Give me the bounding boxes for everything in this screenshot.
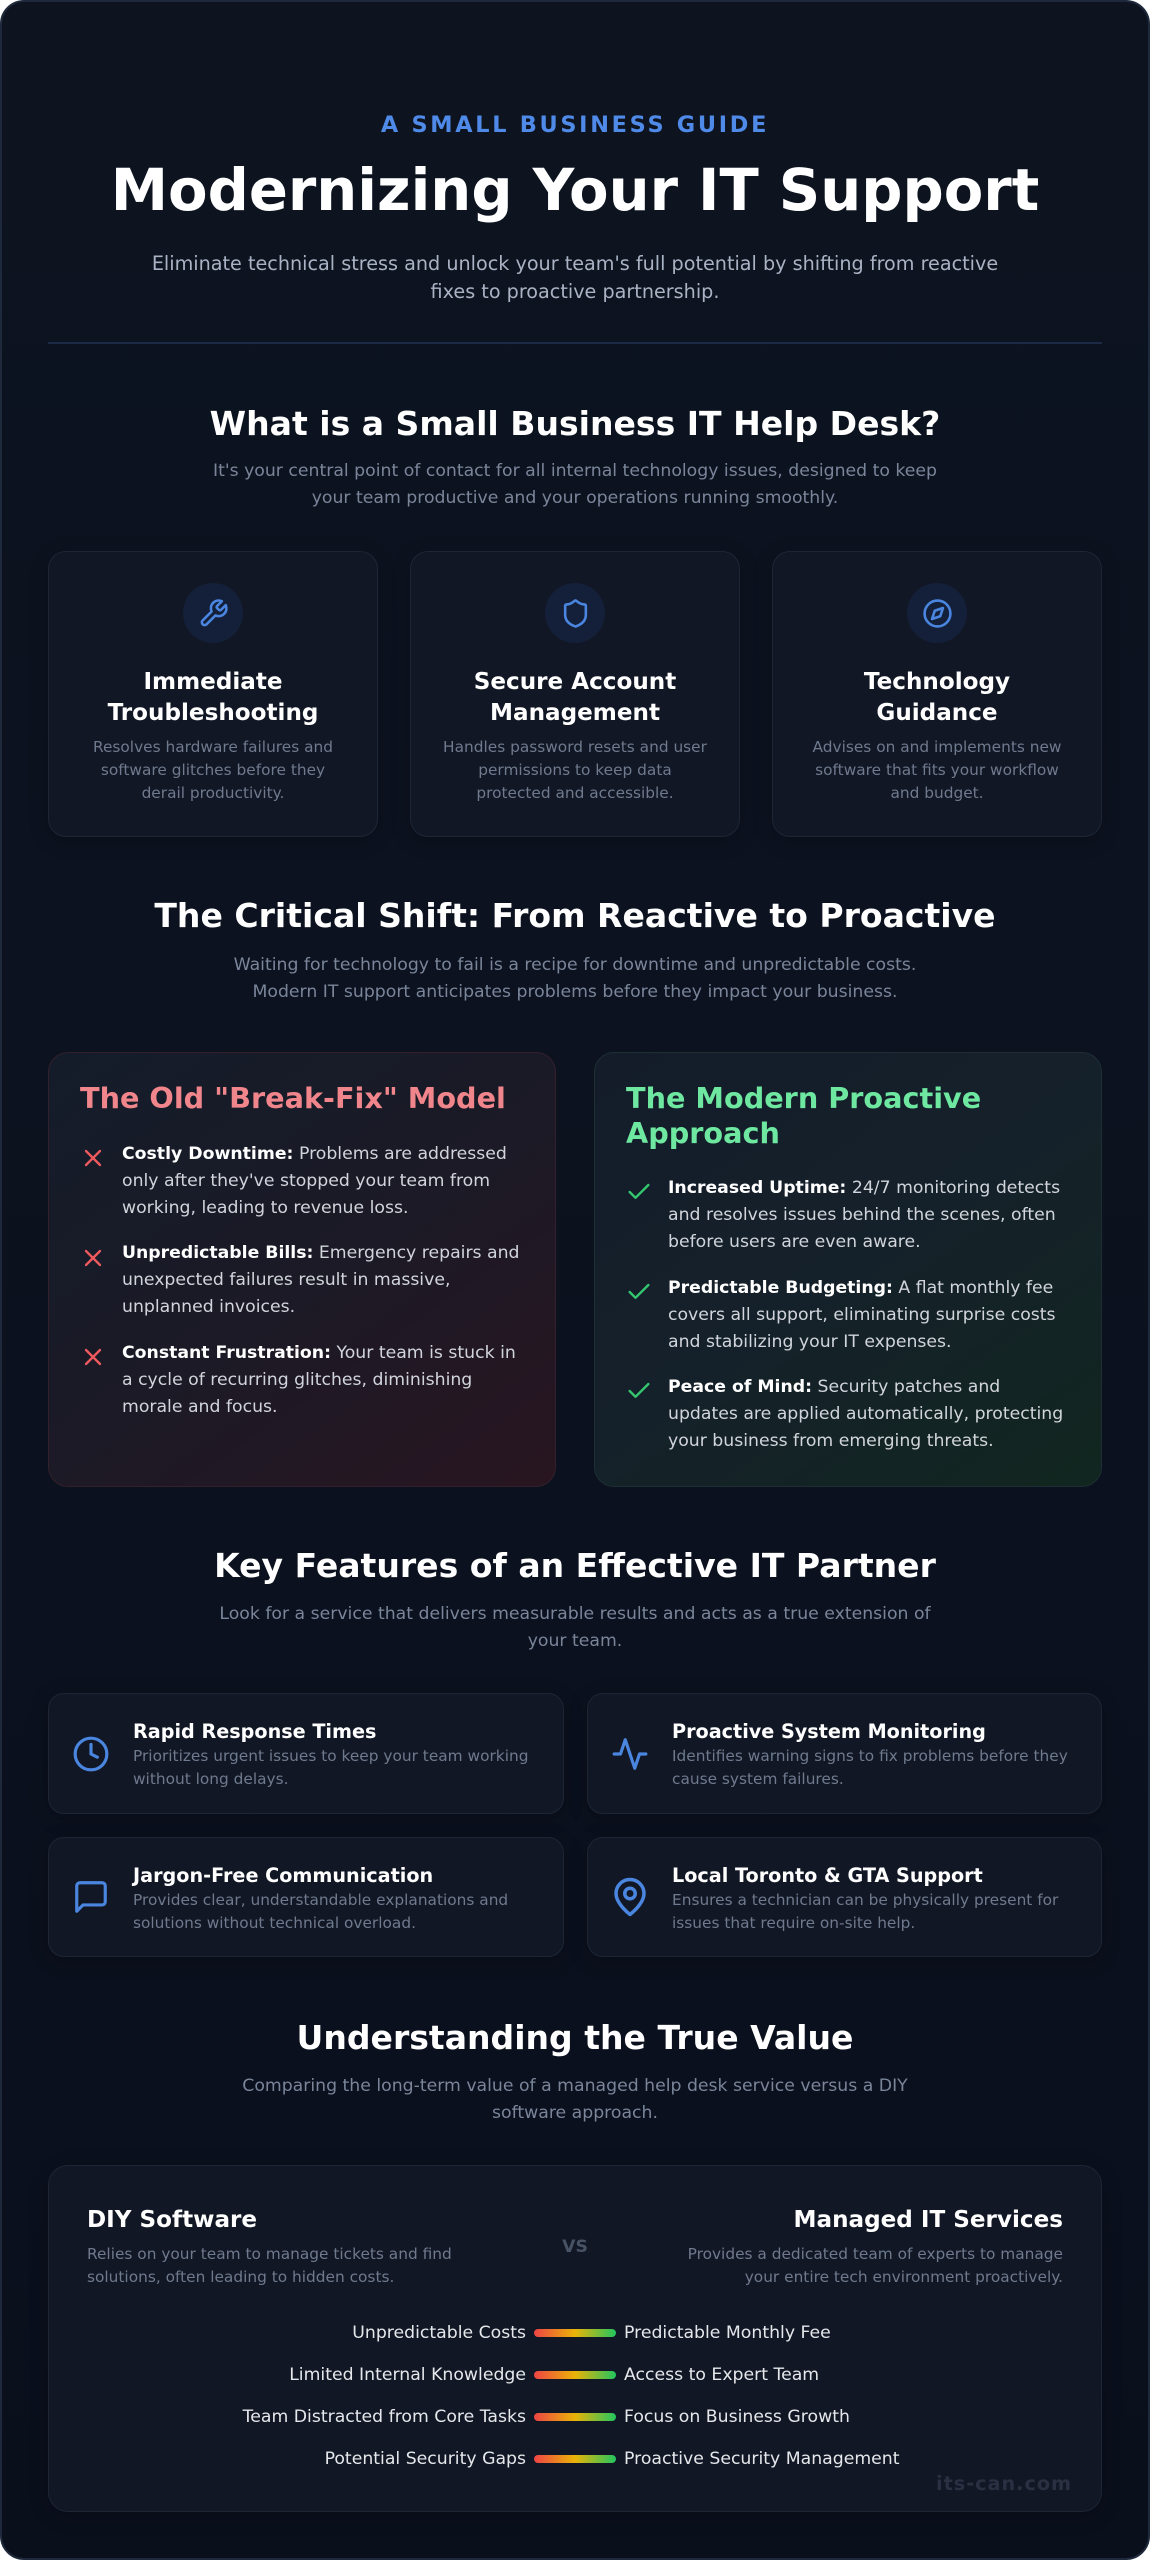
card title: Immediate [143, 669, 283, 695]
gradient bar [534, 2455, 616, 2463]
icon: cross [84, 1150, 102, 1166]
title: Modernizing Your IT Support [111, 157, 1039, 224]
panel: immediate troubleshooting [48, 551, 378, 837]
feature description [133, 1747, 528, 1788]
feature description [672, 1747, 1068, 1788]
card description [812, 738, 1061, 802]
feature: local toronto support [587, 1837, 1102, 1957]
feature title: Proactive System Monitoring [672, 1720, 986, 1743]
gradient bar [534, 2413, 616, 2421]
feature description: Provides clear, understandable explanations and [133, 1891, 508, 1909]
icon: clock [74, 1736, 108, 1772]
card description: derail productivity. [142, 784, 284, 802]
panel heading: Approach [626, 1116, 780, 1150]
card title [108, 669, 318, 726]
item: peace of mind: updates are applied automatically, protecting [668, 1404, 1063, 1424]
card description: and budget. [890, 784, 984, 802]
item: constant frustration [122, 1343, 516, 1417]
feature: proactive system monitoring [587, 1693, 1102, 1814]
item: peace of mind: Peace of Mind: Security patches and [668, 1377, 1000, 1397]
card title [474, 669, 676, 726]
section intro: help desk: your team productive and your operations running smoothly. [312, 488, 838, 508]
item: constant frustration: Constant Frustration: Your team is stuck in [122, 1343, 516, 1363]
card description: permissions to keep data [478, 761, 672, 779]
feature title: Rapid Response Times [133, 1720, 376, 1743]
feature: jargon-free communication [48, 1837, 564, 1957]
item: unpredictable bills: unplanned invoices. [122, 1297, 295, 1317]
comparison row: costs: Unpredictable Costs [352, 2323, 526, 2343]
card description: software glitches before they [101, 761, 325, 779]
card title: Technology [864, 669, 1010, 695]
item: increased uptime: and resolves issues behind the scenes, often [668, 1205, 1056, 1225]
icon: check [628, 1284, 650, 1300]
comparison row: focus: Team Distracted from Core Tasks [243, 2407, 526, 2427]
heading: what is a help desk: What is a Small Business IT Help Desk? [210, 404, 940, 443]
icon: wrench [200, 599, 228, 626]
comparison: managed description: your entire tech environment proactively. [745, 2268, 1063, 2286]
item: unpredictable bills: Unpredictable Bills: Emergency repairs and [122, 1243, 520, 1263]
feature description [672, 1891, 1058, 1932]
feature title: Jargon-Free Communication [133, 1864, 433, 1887]
feature description: issues that require on-site help. [672, 1914, 915, 1932]
item: increased uptime: before users are even aware. [668, 1232, 921, 1252]
icon: shield [564, 599, 588, 628]
item: predictable budgeting [668, 1278, 1056, 1352]
item: constant frustration: a cycle of recurring glitches, diminishing [122, 1370, 472, 1390]
panel: modern proactive approach [594, 1052, 1102, 1487]
card description: Resolves hardware failures and [93, 738, 333, 756]
comparison: DIY title: DIY Software [87, 2207, 257, 2233]
card description [93, 738, 333, 802]
item: predictable budgeting: and stabilizing your IT expenses. [668, 1332, 952, 1352]
panel heading: The Modern Proactive [626, 1081, 981, 1115]
section intro: critical shift: Waiting for technology to fail is a recipe for downtime and unpredictable costs. [234, 955, 916, 975]
icon: compass [923, 599, 952, 628]
feature description: Identifies warning signs to fix problems before they [672, 1747, 1068, 1765]
section intro: critical shift [234, 955, 916, 1002]
icon: map pin [614, 1878, 646, 1916]
section intro: help desk [213, 461, 937, 508]
item: costly downtime: working, leading to revenue loss. [122, 1198, 408, 1218]
feature description [133, 1891, 508, 1932]
item: unpredictable bills [122, 1243, 520, 1317]
eyebrow: A SMALL BUSINESS GUIDE [381, 112, 769, 138]
feature description: cause system failures. [672, 1770, 844, 1788]
panel heading: The Old "Break-Fix" Model [80, 1081, 506, 1115]
feature description: Ensures a technician can be physically present for [672, 1891, 1058, 1909]
intro text: Eliminate technical stress and unlock your team's full potential by shifting from reactive [152, 252, 998, 275]
item: predictable budgeting: covers all support, eliminating surprise costs [668, 1305, 1056, 1325]
item: unpredictable bills: unexpected failures result in massive, [122, 1270, 450, 1290]
panel: secure account management [410, 551, 740, 837]
comparison: DIY description [87, 2245, 452, 2286]
item: peace of mind [668, 1377, 1063, 1451]
card title: Guidance [876, 700, 998, 726]
item: costly downtime [122, 1144, 507, 1218]
comparison row: costs: Predictable Monthly Fee [624, 2323, 831, 2343]
gradient bar [534, 2371, 616, 2379]
comparison: DIY description: Relies on your team to manage tickets and find [87, 2245, 452, 2263]
comparison: managed description [688, 2245, 1063, 2286]
feature description: Prioritizes urgent issues to keep your team working [133, 1747, 528, 1765]
panel: comparison [48, 2165, 1102, 2512]
card title: Management [490, 700, 660, 726]
panel heading [626, 1081, 981, 1150]
gradient bar [534, 2329, 616, 2337]
card description: Advises on and implements new [813, 738, 1061, 756]
card description: Handles password resets and user [443, 738, 707, 756]
icon: check [628, 1382, 650, 1398]
icon: check [628, 1184, 650, 1200]
watermark: its-can.com [936, 2472, 1072, 2495]
comparison: managed description: Provides a dedicated team of experts to manage [688, 2245, 1063, 2263]
item: peace of mind: your business from emerging threats. [668, 1431, 994, 1451]
item: increased uptime [668, 1178, 1060, 1252]
comparison row: knowledge: Limited Internal Knowledge [289, 2365, 526, 2385]
icon: cross [84, 1250, 102, 1266]
card title: Secure Account [474, 669, 676, 695]
comparison: managed title: Managed IT Services [794, 2207, 1063, 2233]
feature title: Local Toronto & GTA Support [672, 1864, 983, 1887]
heading: critical shift: The Critical Shift: From Reactive to Proactive [154, 896, 996, 935]
section intro: true value: Comparing the long-term value of a managed help desk service versus a DIY [242, 2076, 908, 2096]
comparison row: security: Proactive Security Management [624, 2449, 899, 2469]
comparison row: knowledge: Access to Expert Team [624, 2365, 819, 2385]
icon: cross [84, 1348, 102, 1366]
section intro: help desk: It's your central point of contact for all internal technology issues, designed to keep [213, 461, 937, 481]
card title [864, 669, 1010, 726]
feature: rapid response times [48, 1693, 564, 1814]
section intro: key features: Look for a service that delivers measurable results and acts as a true extension of [219, 1604, 931, 1624]
item: costly downtime: Costly Downtime: Problems are addressed [122, 1144, 507, 1164]
card description: software that fits your workflow [815, 761, 1059, 779]
item: costly downtime: only after they've stopped your team from [122, 1171, 490, 1191]
heading: key features: Key Features of an Effective IT Partner [214, 1546, 936, 1585]
section intro: key features: your team. [528, 1631, 622, 1651]
heading: true value: Understanding the True Value [297, 2018, 853, 2057]
feature description: without long delays. [133, 1770, 289, 1788]
icon: activity [612, 1738, 648, 1770]
intro text [152, 252, 998, 302]
comparison row: focus: Focus on Business Growth [624, 2407, 850, 2427]
panel: technology guidance [772, 551, 1102, 837]
card title: Troubleshooting [108, 700, 318, 726]
VS label: VS [562, 2237, 588, 2257]
item: predictable budgeting: Predictable Budgeting: A flat monthly fee [668, 1278, 1053, 1298]
item: constant frustration: morale and focus. [122, 1397, 278, 1417]
card description [443, 738, 707, 802]
panel: old break-fix model [48, 1052, 556, 1487]
intro text: fixes to proactive partnership. [431, 280, 719, 302]
feature description: solutions without technical overload. [133, 1914, 416, 1932]
comparison row: security: Potential Security Gaps [325, 2449, 526, 2469]
icon: chat bubble [75, 1881, 107, 1913]
section intro: true value [242, 2076, 908, 2123]
item: increased uptime: Increased Uptime: 24/7 monitoring detects [668, 1178, 1060, 1198]
section intro: true value: software approach. [492, 2103, 658, 2123]
section intro: critical shift: Modern IT support anticipates problems before they impact your business. [253, 982, 897, 1002]
section intro: key features [219, 1604, 931, 1651]
card description: protected and accessible. [476, 784, 674, 802]
comparison: DIY description: solutions, often leading to hidden costs. [87, 2268, 394, 2286]
